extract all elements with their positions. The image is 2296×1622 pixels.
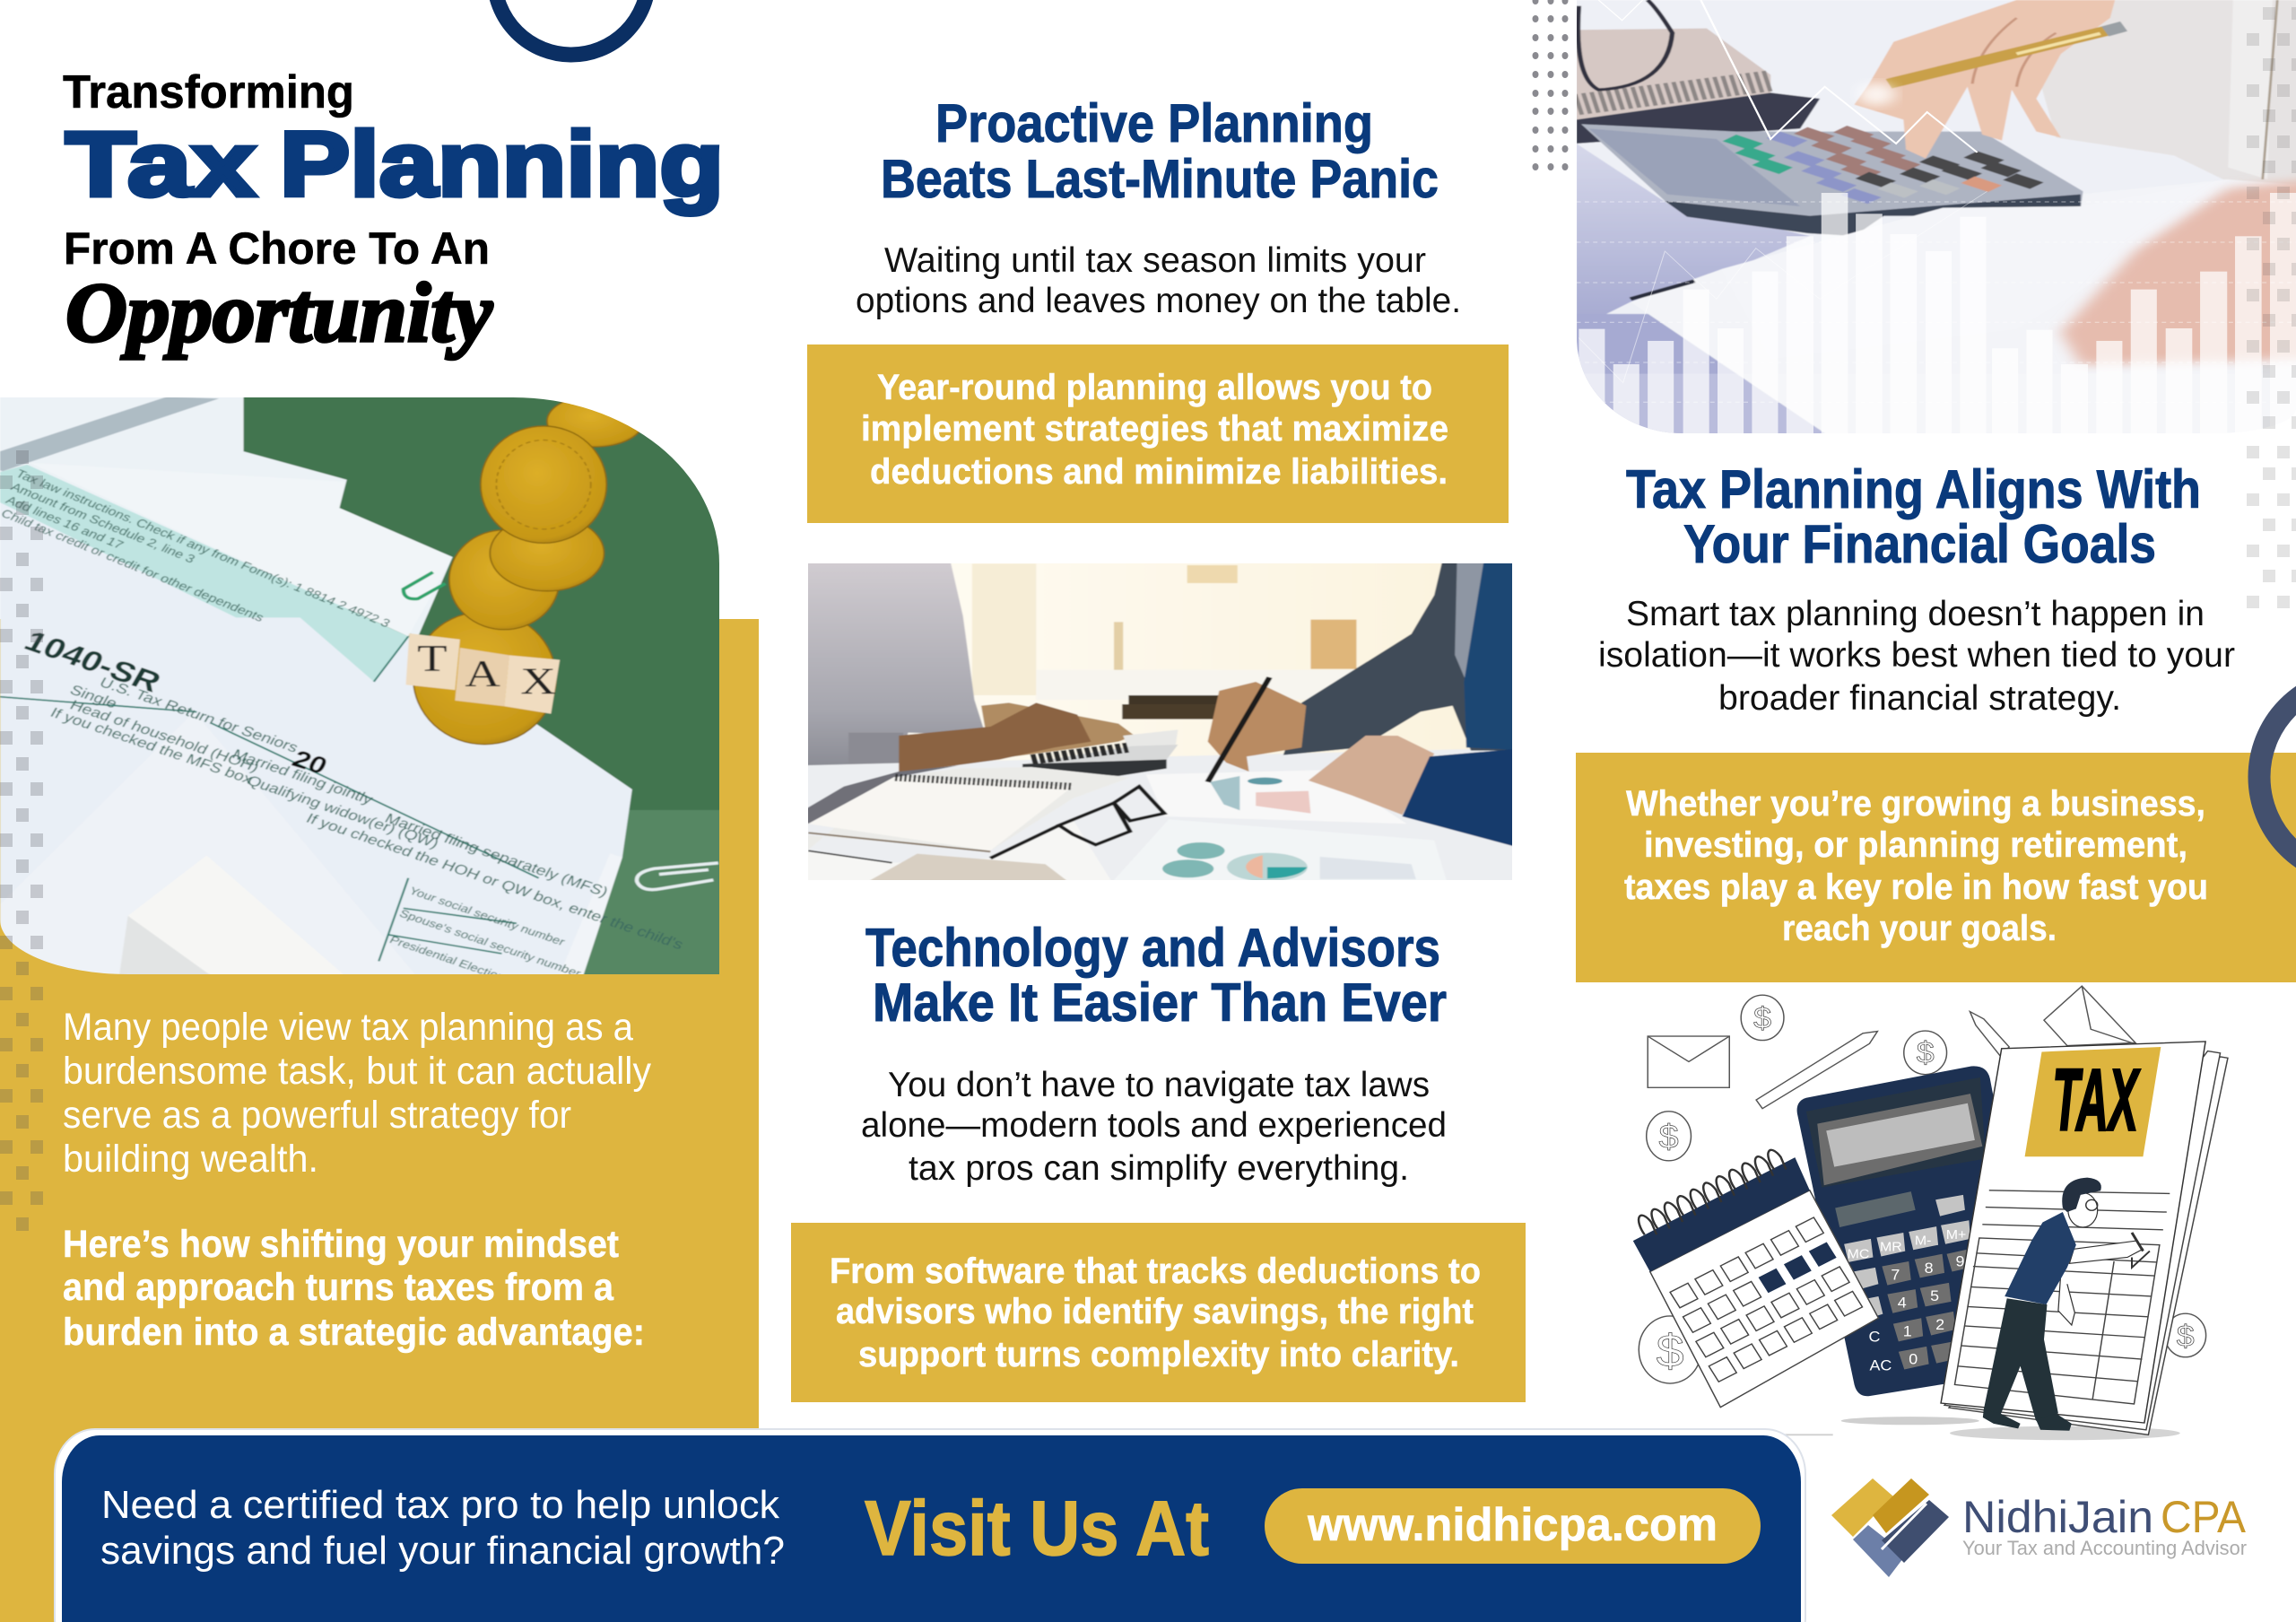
decorative navy ring top (494, 0, 648, 55)
icon: tax document stack (1941, 1042, 2228, 1435)
photo: tax forms with coins: Married filing jointly (230, 746, 377, 807)
bold lead-in paragraph: and approach turns taxes from a (63, 1266, 614, 1309)
callout box (791, 1223, 1526, 1402)
title block (63, 66, 724, 360)
icon: envelope (1648, 1036, 1729, 1087)
banner question: savings and fuel your financial growth? (100, 1529, 785, 1573)
dot pattern top right (1532, 0, 1568, 170)
callout box: support turns complexity into clarity. (858, 1335, 1459, 1374)
photo: tax forms with coins: Married filing separately (MFS) (382, 810, 611, 900)
title line: From A Chore To An: From A Chore To An (64, 223, 490, 274)
logo (1831, 1478, 2247, 1577)
icons: dollar coins (1639, 995, 2206, 1383)
icon: calculator: 2 (1935, 1316, 1944, 1333)
heading: proactive planning (881, 93, 1439, 209)
wooden TAX blocks: T (417, 637, 448, 680)
body text (861, 1066, 1447, 1188)
heading: proactive planning: Beats Last-Minute Panic (881, 149, 1439, 209)
logo mark (1831, 1478, 1949, 1577)
logo wordmark: Your Tax and Accounting Advisor (1962, 1537, 2247, 1559)
icon: calculator: AC (1869, 1356, 1892, 1373)
callout box: taxes play a key role in how fast you (1624, 868, 2208, 907)
intro paragraph (63, 1006, 651, 1181)
photo: tax forms with coins: Presidential Election Campaign (387, 934, 569, 1004)
photo: advisors at a desk (798, 556, 1530, 885)
visit us at: Visit Us At (865, 1486, 1209, 1572)
photo: tax forms with coins: Your social security number (407, 885, 568, 948)
banner question: Need a certified tax pro to help unlock (101, 1483, 780, 1527)
photo: tax forms with coins: Spouse's social security number (397, 907, 584, 980)
photo: hand on calculator with bar chart overlay (1525, 0, 2296, 437)
photo: tax forms with coins: If you checked the MFS box (48, 704, 257, 787)
heading: technology and advisors: Make It Easier Than Ever (873, 972, 1447, 1033)
body text: Smart tax planning doesn’t happen in (1626, 595, 2205, 633)
form label: 2020: 20 (288, 746, 332, 780)
heading: financial goals: Your Financial Goals (1683, 514, 2156, 574)
logo wordmark: CPA (2161, 1492, 2247, 1542)
pie charts (1162, 842, 1308, 882)
photo: tax forms with coins: U.S. Tax Return for Seniors (97, 675, 301, 755)
callout box (807, 344, 1509, 523)
icon: calculator: 8 (1925, 1260, 1934, 1277)
banner question (100, 1483, 785, 1573)
banner (55, 1429, 1805, 1622)
photo: tax forms with coins: Single (67, 682, 120, 711)
right square pattern (2247, 7, 2296, 608)
title line: Tax Planning (65, 113, 724, 215)
bold lead-in paragraph (63, 1223, 645, 1354)
logo wordmark: NidhiJain (1962, 1492, 2153, 1542)
title line: Tax Planning: Planning (280, 113, 724, 215)
icon: calculator: MR (1880, 1240, 1902, 1254)
heading: technology and advisors (865, 918, 1447, 1033)
callout box: From software that tracks deductions to (830, 1251, 1481, 1291)
icon: tax document stack: TAX (2052, 1051, 2141, 1149)
photo: tax forms with coins: Child tax credit or credit for other dependents (0, 508, 266, 624)
bold lead-in paragraph: Here’s how shifting your mindset (63, 1223, 619, 1266)
wooden TAX blocks: X (520, 659, 556, 702)
website pill (1265, 1488, 1761, 1564)
callout box: reach your goals. (1782, 909, 2057, 948)
figure: man writing on form (1983, 1178, 2150, 1431)
yellow left panel (0, 619, 759, 1622)
heading: financial goals: Tax Planning Aligns With (1626, 459, 2201, 519)
shadows (1841, 1417, 2180, 1440)
body text: You don’t have to navigate tax laws (888, 1066, 1430, 1104)
callout box: Whether you’re growing a business, (1626, 784, 2205, 824)
wooden TAX blocks (406, 633, 560, 714)
wooden TAX blocks: A (465, 652, 500, 694)
bold lead-in paragraph: burden into a strategic advantage: (63, 1311, 645, 1354)
form label: 1040-SR: 1040-SR (19, 624, 167, 698)
icon: calculator: M- (1915, 1234, 1931, 1249)
body text: broader financial strategy. (1718, 679, 2121, 718)
panel: proactive planning (807, 93, 1509, 523)
icon: calculator (1797, 1066, 1996, 1396)
icons: dollar coins: $ (1753, 1002, 1771, 1035)
paper clip green (404, 572, 445, 599)
photo: tax forms with coins: Add lines 16 and 17 (3, 494, 126, 552)
heading: proactive planning: Proactive Planning (935, 93, 1373, 153)
body text: Waiting until tax season limits your (884, 241, 1426, 280)
callout box (1576, 753, 2296, 982)
photo: tax forms with coins (0, 395, 728, 1004)
icon: calculator: M+ (1946, 1227, 1966, 1243)
photo: tax forms with coins: If you checked the HOH or QW box, enter the child's (303, 810, 687, 953)
intro paragraph: Many people view tax planning as a (63, 1006, 633, 1049)
icon: calendar (1633, 1150, 1878, 1408)
callout box: Year-round planning allows you to (877, 368, 1432, 407)
title line: Tax Planning: Tax (65, 113, 256, 215)
heading: technology and advisors: Technology and Advisors (865, 918, 1440, 978)
left text block (63, 1006, 651, 1354)
icon: calculator: 7 (1891, 1266, 1900, 1283)
illustration: tax paperwork, calculator, calendar and man (1633, 986, 2228, 1440)
panel: technology and advisors (791, 918, 1526, 1402)
icon: envelope behind paper (2044, 986, 2135, 1046)
photo: tax forms with coins: Amount from Schedule 2, line 3 (8, 481, 197, 566)
icon: pencil (1756, 1032, 1877, 1109)
website pill: www.nidhicpa.com (1307, 1499, 1718, 1551)
photo: tax forms with coins: Qualifying widow(er) (QW) (244, 772, 442, 851)
icon: calculator: C (1868, 1328, 1880, 1345)
heading: financial goals (1626, 459, 2201, 574)
body text: isolation—it works best when tied to your (1598, 636, 2235, 675)
callout box: deductions and minimize liabilities. (870, 452, 1448, 492)
eyeglasses (990, 787, 1164, 859)
callout box: advisors who identify savings, the right (836, 1292, 1474, 1331)
icon: calculator: 0 (1909, 1350, 1918, 1367)
decorative ring right (2259, 678, 2296, 876)
callout box: implement strategies that maximize (861, 409, 1448, 449)
body text: tax pros can simplify everything. (909, 1149, 1409, 1188)
body text: alone—modern tools and experienced (861, 1106, 1447, 1145)
body text (856, 241, 1461, 320)
body text (1598, 595, 2235, 718)
icons: dollar coins: $ (1657, 1326, 1684, 1376)
logo wordmark (1962, 1492, 2247, 1559)
title line: Transforming: Transforming (63, 66, 354, 118)
photo: tax forms with coins: Tax law instructions. Check if any from Form(s): 1 8814 2 4972 3 (13, 467, 393, 631)
icon: calculator: 5 (1930, 1287, 1939, 1304)
intro paragraph: building wealth. (63, 1138, 318, 1181)
panel: financial goals (1576, 459, 2296, 982)
icon: calculator: 4 (1898, 1294, 1907, 1311)
body text: options and leaves money on the table. (856, 282, 1461, 320)
title line: Opportunity: Opportunity (65, 266, 492, 360)
paper clip white (637, 863, 718, 890)
icon: calculator: 9 (1955, 1252, 1964, 1269)
icon: pencil behind paper (1970, 1012, 2009, 1056)
callout box: investing, or planning retirement, (1644, 825, 2187, 865)
icons: dollar coins: $ (2177, 1321, 2195, 1353)
icons: dollar coins: $ (1659, 1119, 1679, 1155)
photo: tax forms with coins: Head of household (HOH) (67, 697, 262, 775)
intro paragraph: burdensome task, but it can actually (63, 1050, 651, 1093)
icon: calculator: MC (1848, 1247, 1869, 1261)
intro paragraph: serve as a powerful strategy for (63, 1094, 571, 1137)
icon: calculator: 1 (1903, 1322, 1912, 1339)
icons: dollar coins: $ (1917, 1037, 1935, 1069)
